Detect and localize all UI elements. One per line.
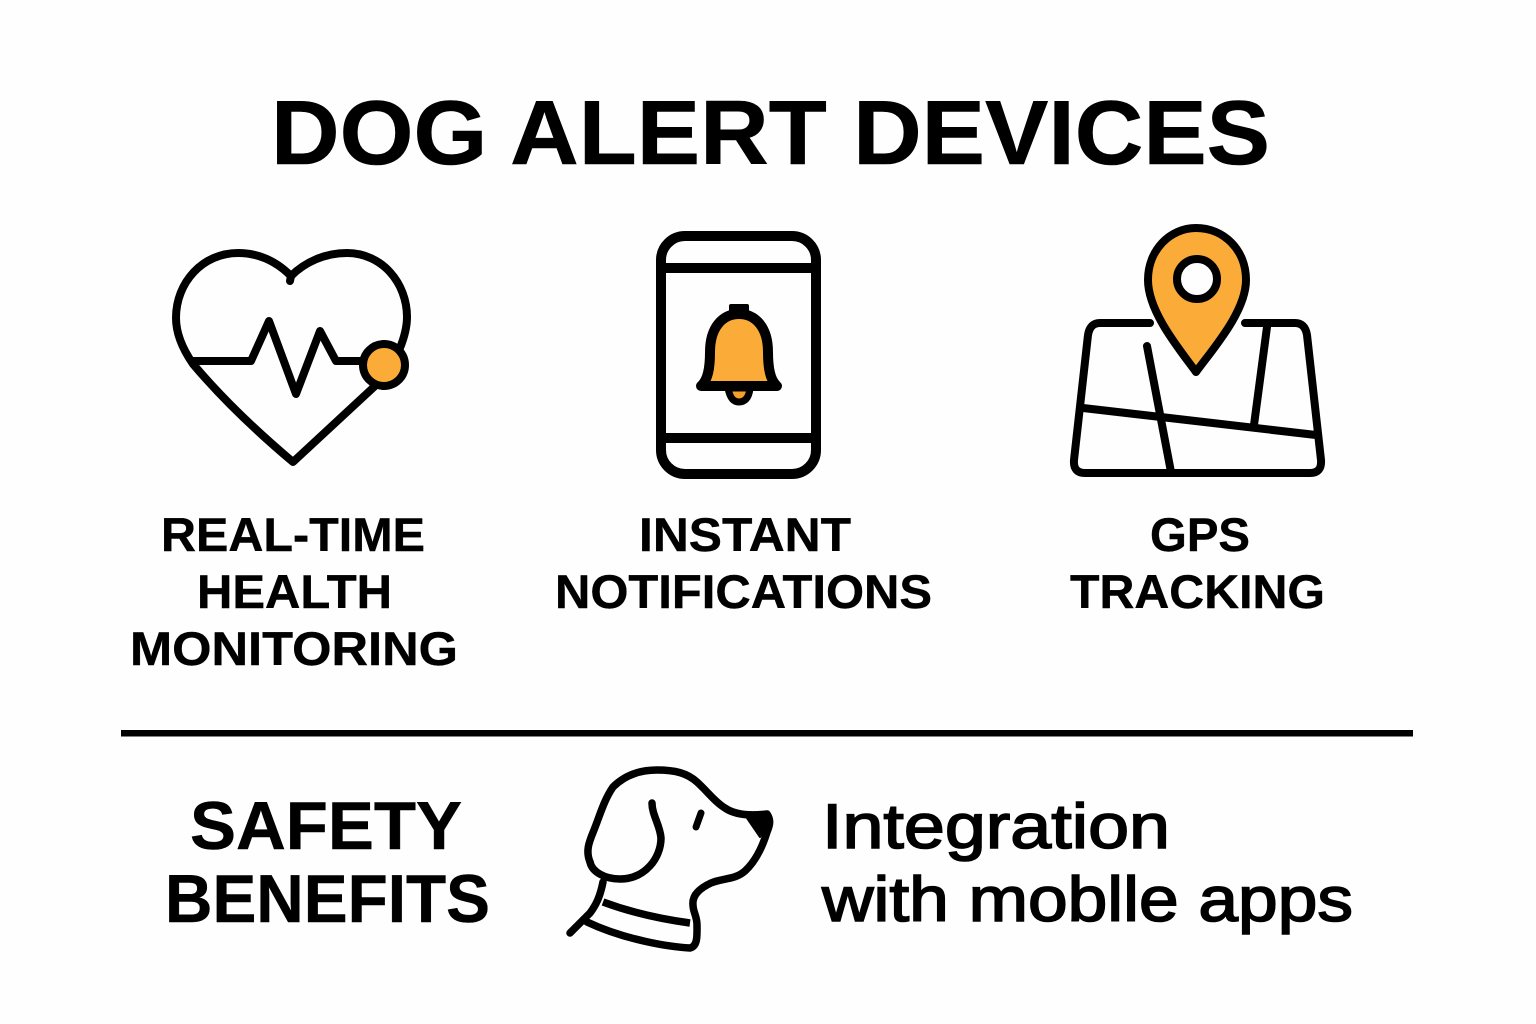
heading: safety benefits: SAFETY [190, 788, 462, 864]
panel: instant notifications [555, 236, 932, 618]
title: DOG ALERT DEVICES [271, 83, 1270, 184]
panel: real-time health monitoring [130, 253, 458, 675]
label: real-time health monitoring: MONITORING [130, 622, 458, 675]
icon: heart with pulse [176, 253, 407, 462]
text: integration with mobile apps: with moblle apps [821, 865, 1353, 935]
text: integration with mobile apps: Integration [822, 792, 1170, 862]
text: integration with mobile apps [821, 792, 1353, 935]
label: gps tracking [1070, 508, 1325, 618]
panel: gps tracking [1070, 228, 1325, 618]
label: instant notifications [555, 508, 932, 618]
label: gps tracking: GPS [1150, 508, 1250, 561]
heading: safety benefits: BENEFITS [165, 861, 490, 937]
label: real-time health monitoring: REAL-TIME [161, 508, 425, 561]
icon: dog head with collar [570, 770, 772, 948]
icon: phone with bell [661, 236, 816, 474]
label: real-time health monitoring [130, 508, 458, 675]
icon: map with location pin [1074, 228, 1321, 473]
label: instant notifications: NOTIFICATIONS [555, 565, 932, 618]
label: gps tracking: TRACKING [1070, 565, 1325, 618]
label: instant notifications: INSTANT [639, 508, 851, 561]
label: real-time health monitoring: HEALTH [197, 565, 392, 618]
heading: safety benefits [165, 788, 490, 937]
